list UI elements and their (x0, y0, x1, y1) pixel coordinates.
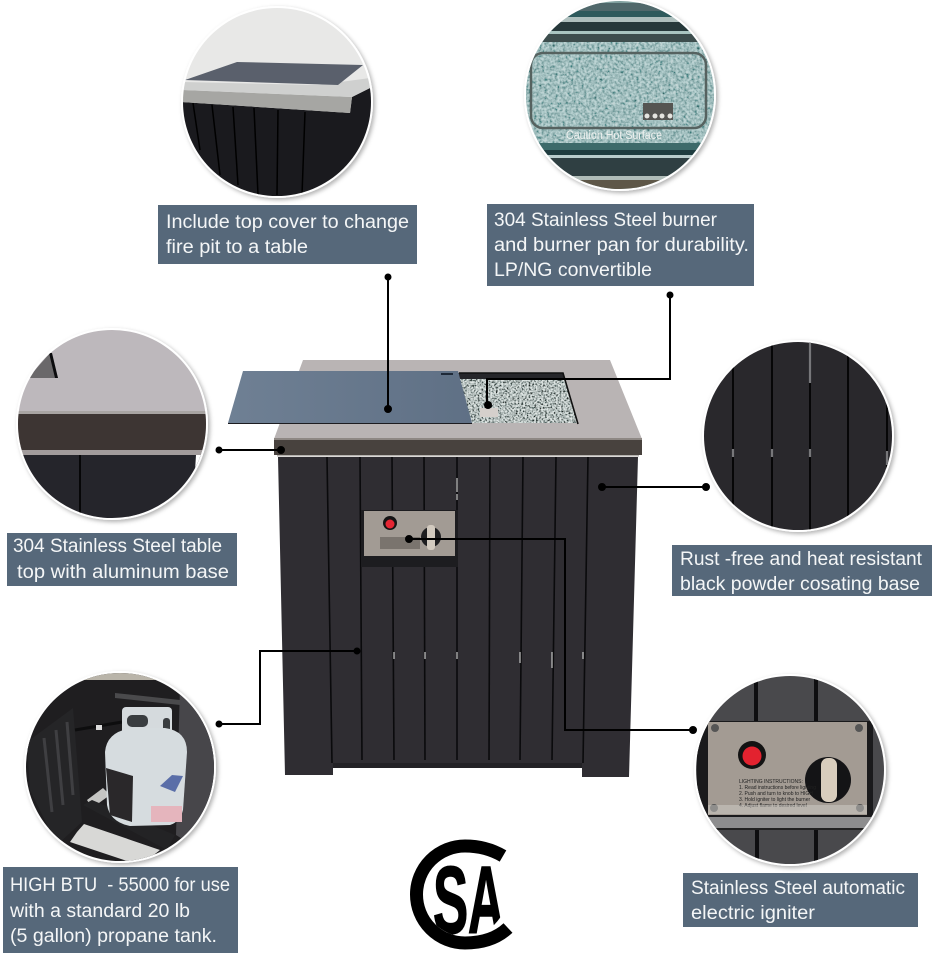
burner frame (459, 373, 578, 424)
callout: burner (485, 292, 672, 408)
photo circle: burner and glass: Caution Hot Surface (566, 130, 662, 142)
label: base coating: black powder cosating base (680, 574, 920, 595)
label: base coating (672, 545, 932, 596)
label: table top (7, 533, 237, 586)
label: propane tank: HIGH BTU - 55000 for use (10, 875, 230, 896)
icon: CSA certification mark (416, 846, 508, 954)
callout: table top (216, 447, 284, 453)
label: burner: 304 Stainless Steel burner (494, 210, 718, 231)
callout: base coating (599, 484, 709, 490)
photo circle: burner and glass (520, 0, 720, 195)
stainless steel table top (274, 360, 642, 456)
photo circle: propane tank (22, 670, 218, 865)
label: propane tank: with a standard 20 lb (9, 901, 190, 922)
photo circle: electric igniter: 2. Push and turn to knob to HIGH (739, 791, 813, 797)
photo circle: top cover (180, 5, 375, 200)
removable top cover (228, 371, 472, 424)
label: top cover (158, 205, 417, 264)
callout: igniter (406, 536, 696, 733)
icon: CSA certification mark: A (468, 848, 504, 954)
callout: top cover (385, 274, 391, 412)
label: igniter: electric igniter (691, 903, 816, 924)
photo circle: electric igniter: 3. Hold igniter to light the burner (739, 797, 810, 803)
label: burner: LP/NG convertible (494, 260, 652, 281)
product: fire pit table (228, 360, 642, 777)
label: propane tank: (5 gallon) propane tank. (10, 926, 217, 947)
label: top cover: fire pit to a table (166, 237, 308, 258)
photo circle: electric igniter (692, 672, 888, 868)
label: igniter: Stainless Steel automatic (691, 878, 905, 899)
label: table top: top with aluminum base (17, 562, 229, 583)
glass burner area (458, 373, 577, 423)
control panel (361, 510, 458, 567)
label: base coating: Rust -free and heat resistant (680, 549, 923, 570)
label: table top: 304 Stainless Steel table (13, 536, 222, 557)
fire pit body with vertical planks (278, 457, 638, 777)
photo circle: electric igniter: 1. Read instructions before lighting (739, 785, 816, 791)
photo circle: stainless table top (15, 325, 210, 520)
icon: CSA certification mark: S (433, 847, 468, 954)
photo circle: black powder coated base (700, 340, 896, 535)
photo circle: electric igniter: LIGHTING INSTRUCTIONS: (739, 779, 803, 785)
label: igniter (683, 873, 918, 927)
label: propane tank (3, 867, 238, 953)
callout: propane tank (216, 648, 360, 726)
label: top cover: Include top cover to change (166, 212, 409, 233)
label: burner: and burner pan for durability. (494, 235, 749, 256)
label: burner (487, 204, 754, 286)
callout lines and dots (216, 274, 709, 733)
photo circle: electric igniter: 4. Adjust flame to desired level (739, 803, 807, 809)
